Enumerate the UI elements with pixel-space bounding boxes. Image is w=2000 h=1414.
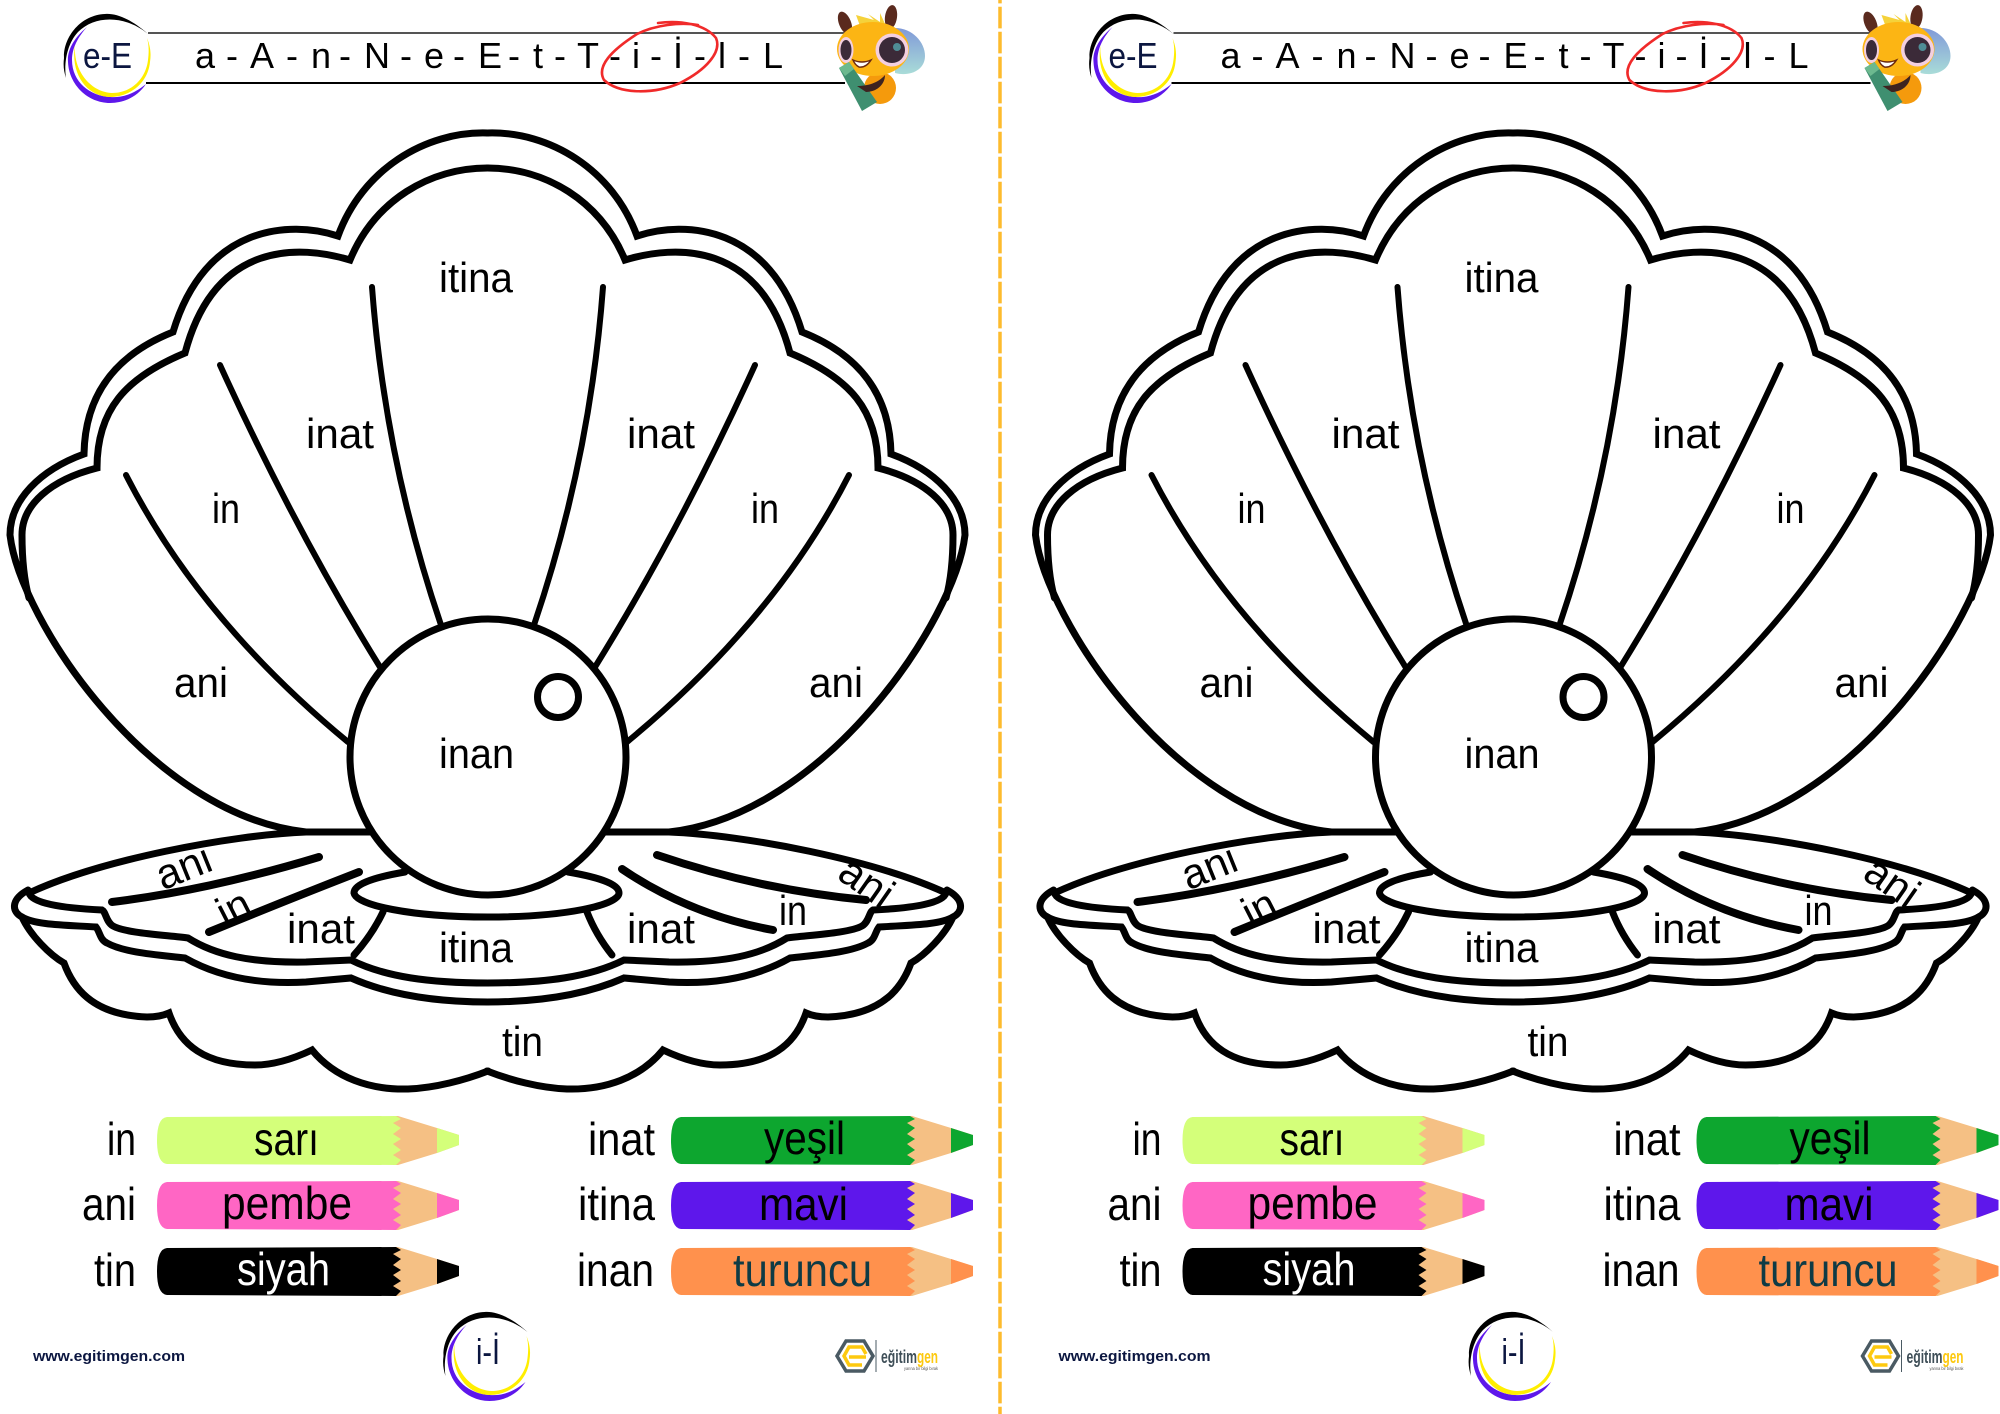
footer logo text i-İ: i-İ bbox=[1502, 1331, 1526, 1372]
pencil legend: in = sarı: in bbox=[107, 1113, 136, 1165]
pencil legend: in = sarı bbox=[1132, 1113, 1484, 1165]
shell word labels: in bbox=[751, 485, 779, 532]
shell word labels: itina bbox=[439, 254, 514, 301]
shell word labels: itina bbox=[1464, 254, 1539, 301]
shell word labels: ani bbox=[1834, 659, 1888, 706]
pencil legend: itina = mavi bbox=[578, 1178, 973, 1230]
shell word labels: ani bbox=[174, 659, 228, 706]
brand logo: eğitimgen: eğitim bbox=[881, 1347, 917, 1367]
brand logo: eğitimgen bbox=[837, 1340, 939, 1372]
pencil legend: inat = yeşil: yeşil bbox=[1790, 1112, 1870, 1164]
logo text e-E: e-E bbox=[83, 35, 132, 76]
shell word labels: tin bbox=[502, 1018, 543, 1065]
red hand-drawn circle around i-İ bbox=[602, 22, 717, 91]
shell word labels: in bbox=[212, 485, 240, 532]
pencil legend: itina = mavi: mavi bbox=[759, 1178, 848, 1230]
icon: circular logo with swooshes bbox=[64, 14, 151, 103]
pencil legend: inan = turuncu: inan bbox=[1602, 1244, 1680, 1296]
icon: footer circular logo bbox=[443, 1312, 530, 1401]
pencil legend: inat = yeşil: inat bbox=[1614, 1113, 1681, 1165]
shell word labels: inat bbox=[1652, 905, 1721, 952]
brand logo: eğitimgen: yarına bir bilgi bırak bbox=[904, 1366, 939, 1371]
shell word labels bbox=[149, 254, 903, 1065]
shell word labels: in bbox=[1804, 887, 1832, 934]
shell word labels: ani bbox=[809, 659, 863, 706]
red hand-drawn circle around i-İ bbox=[1627, 22, 1743, 91]
header strip lines bbox=[1172, 33, 1870, 83]
alphabet line: a-A-n-N-e-E-t-T-i-İ-l-L bbox=[1220, 35, 1809, 76]
shell illustration: upper fan bbox=[1036, 133, 1990, 832]
shell illustration: lower valve bbox=[1040, 832, 1986, 1089]
shell word labels: ani bbox=[1174, 834, 1244, 899]
pencil legend: itina = mavi: itina bbox=[578, 1178, 655, 1230]
pencil legend: ani = pembe: ani bbox=[1108, 1178, 1162, 1230]
pencil legend: inan = turuncu: turuncu bbox=[1758, 1244, 1898, 1296]
shell word labels: itina bbox=[439, 924, 514, 971]
pencil legend: inan = turuncu bbox=[1602, 1244, 1998, 1296]
panel: left worksheet bbox=[10, 4, 973, 1401]
shell illustration: lower valve bbox=[14, 832, 961, 1089]
pencil legend: ani = pembe: ani bbox=[82, 1178, 136, 1230]
pencil legend: ani = pembe bbox=[1108, 1177, 1484, 1230]
shell word labels: in bbox=[1776, 485, 1804, 532]
pencil legend: in = sarı: sarı bbox=[254, 1113, 319, 1165]
shell word labels: ani bbox=[1856, 846, 1929, 917]
icon: bee mascot holding a pencil bbox=[835, 4, 925, 111]
shell word labels: in bbox=[779, 887, 807, 934]
shell word labels: inat bbox=[1332, 410, 1400, 457]
dashed orange page divider bbox=[998, 0, 1002, 1414]
header strip lines bbox=[146, 33, 845, 83]
shell word labels: itina bbox=[1464, 924, 1539, 971]
icon: footer circular logo bbox=[1469, 1312, 1556, 1401]
pencil legend: inan = turuncu: inan bbox=[577, 1244, 654, 1296]
pencil legend: ani = pembe: pembe bbox=[222, 1177, 352, 1229]
pencil legend: tin = siyah: tin bbox=[1120, 1244, 1162, 1296]
pencil legend: inat = yeşil bbox=[1614, 1112, 1998, 1165]
shell word labels: in bbox=[1238, 485, 1266, 532]
brand logo: eğitimgen: gen bbox=[917, 1347, 938, 1367]
website url: www.egitimgen.com bbox=[32, 1348, 185, 1365]
alphabet line: a-A-n-N-e-E-t-T-i-İ-l-L bbox=[195, 35, 783, 76]
shell word labels: inat bbox=[1652, 410, 1721, 457]
shell word labels: inat bbox=[1312, 905, 1381, 952]
pencil legend: tin = siyah bbox=[94, 1243, 459, 1296]
pencil legend: inat = yeşil bbox=[588, 1112, 973, 1165]
shell word labels bbox=[1174, 254, 1929, 1065]
pencil legend: in = sarı: sarı bbox=[1280, 1113, 1344, 1165]
shell word labels: inat bbox=[287, 905, 355, 952]
website url: www.egitimgen.com bbox=[1057, 1348, 1210, 1365]
pencil legend: in = sarı: in bbox=[1132, 1113, 1162, 1165]
shell word labels: inat bbox=[627, 905, 695, 952]
shell word labels: inat bbox=[306, 410, 374, 457]
shell word labels: tin bbox=[1528, 1018, 1568, 1065]
footer logo text i-İ: i-İ bbox=[476, 1331, 500, 1372]
pencil legend: inan = turuncu: turuncu bbox=[733, 1244, 872, 1296]
pencil legend: inat = yeşil: yeşil bbox=[764, 1112, 845, 1164]
shell word labels: ani bbox=[830, 846, 903, 917]
pencil legend: ani = pembe bbox=[82, 1177, 459, 1230]
shell word labels: ani bbox=[1200, 659, 1254, 706]
shell word labels: ani bbox=[149, 834, 218, 899]
pencil legend: tin = siyah: siyah bbox=[237, 1243, 330, 1295]
pencil legend: inat = yeşil: inat bbox=[588, 1113, 655, 1165]
pencil legend: itina = mavi bbox=[1604, 1178, 1998, 1230]
pencil legend: ani = pembe: pembe bbox=[1248, 1177, 1378, 1229]
pencil legend: in = sarı bbox=[107, 1113, 459, 1165]
pencil legend: tin = siyah: siyah bbox=[1262, 1243, 1356, 1295]
pearl with highlight bbox=[1376, 619, 1652, 895]
shell word labels: inan bbox=[439, 730, 514, 777]
icon: bee mascot holding a pencil bbox=[1860, 4, 1950, 111]
pencil legend: tin = siyah bbox=[1120, 1243, 1484, 1296]
icon: circular logo with swooshes bbox=[1089, 14, 1176, 103]
shell word labels: inat bbox=[627, 410, 695, 457]
logo text e-E: e-E bbox=[1108, 35, 1158, 76]
pencil legend: itina = mavi: mavi bbox=[1784, 1178, 1874, 1230]
panel: right worksheet bbox=[1036, 4, 1998, 1401]
pencil legend: tin = siyah: tin bbox=[94, 1244, 136, 1296]
pearl with highlight bbox=[350, 619, 626, 895]
shell illustration: upper fan bbox=[10, 133, 965, 832]
pencil legend: itina = mavi: itina bbox=[1604, 1178, 1681, 1230]
brand logo: eğitimgen bbox=[1862, 1340, 1964, 1372]
pencil legend: inan = turuncu bbox=[577, 1244, 973, 1296]
shell word labels: in bbox=[208, 879, 259, 936]
shell word labels: inan bbox=[1464, 730, 1540, 777]
shell word labels: in bbox=[1234, 879, 1284, 936]
